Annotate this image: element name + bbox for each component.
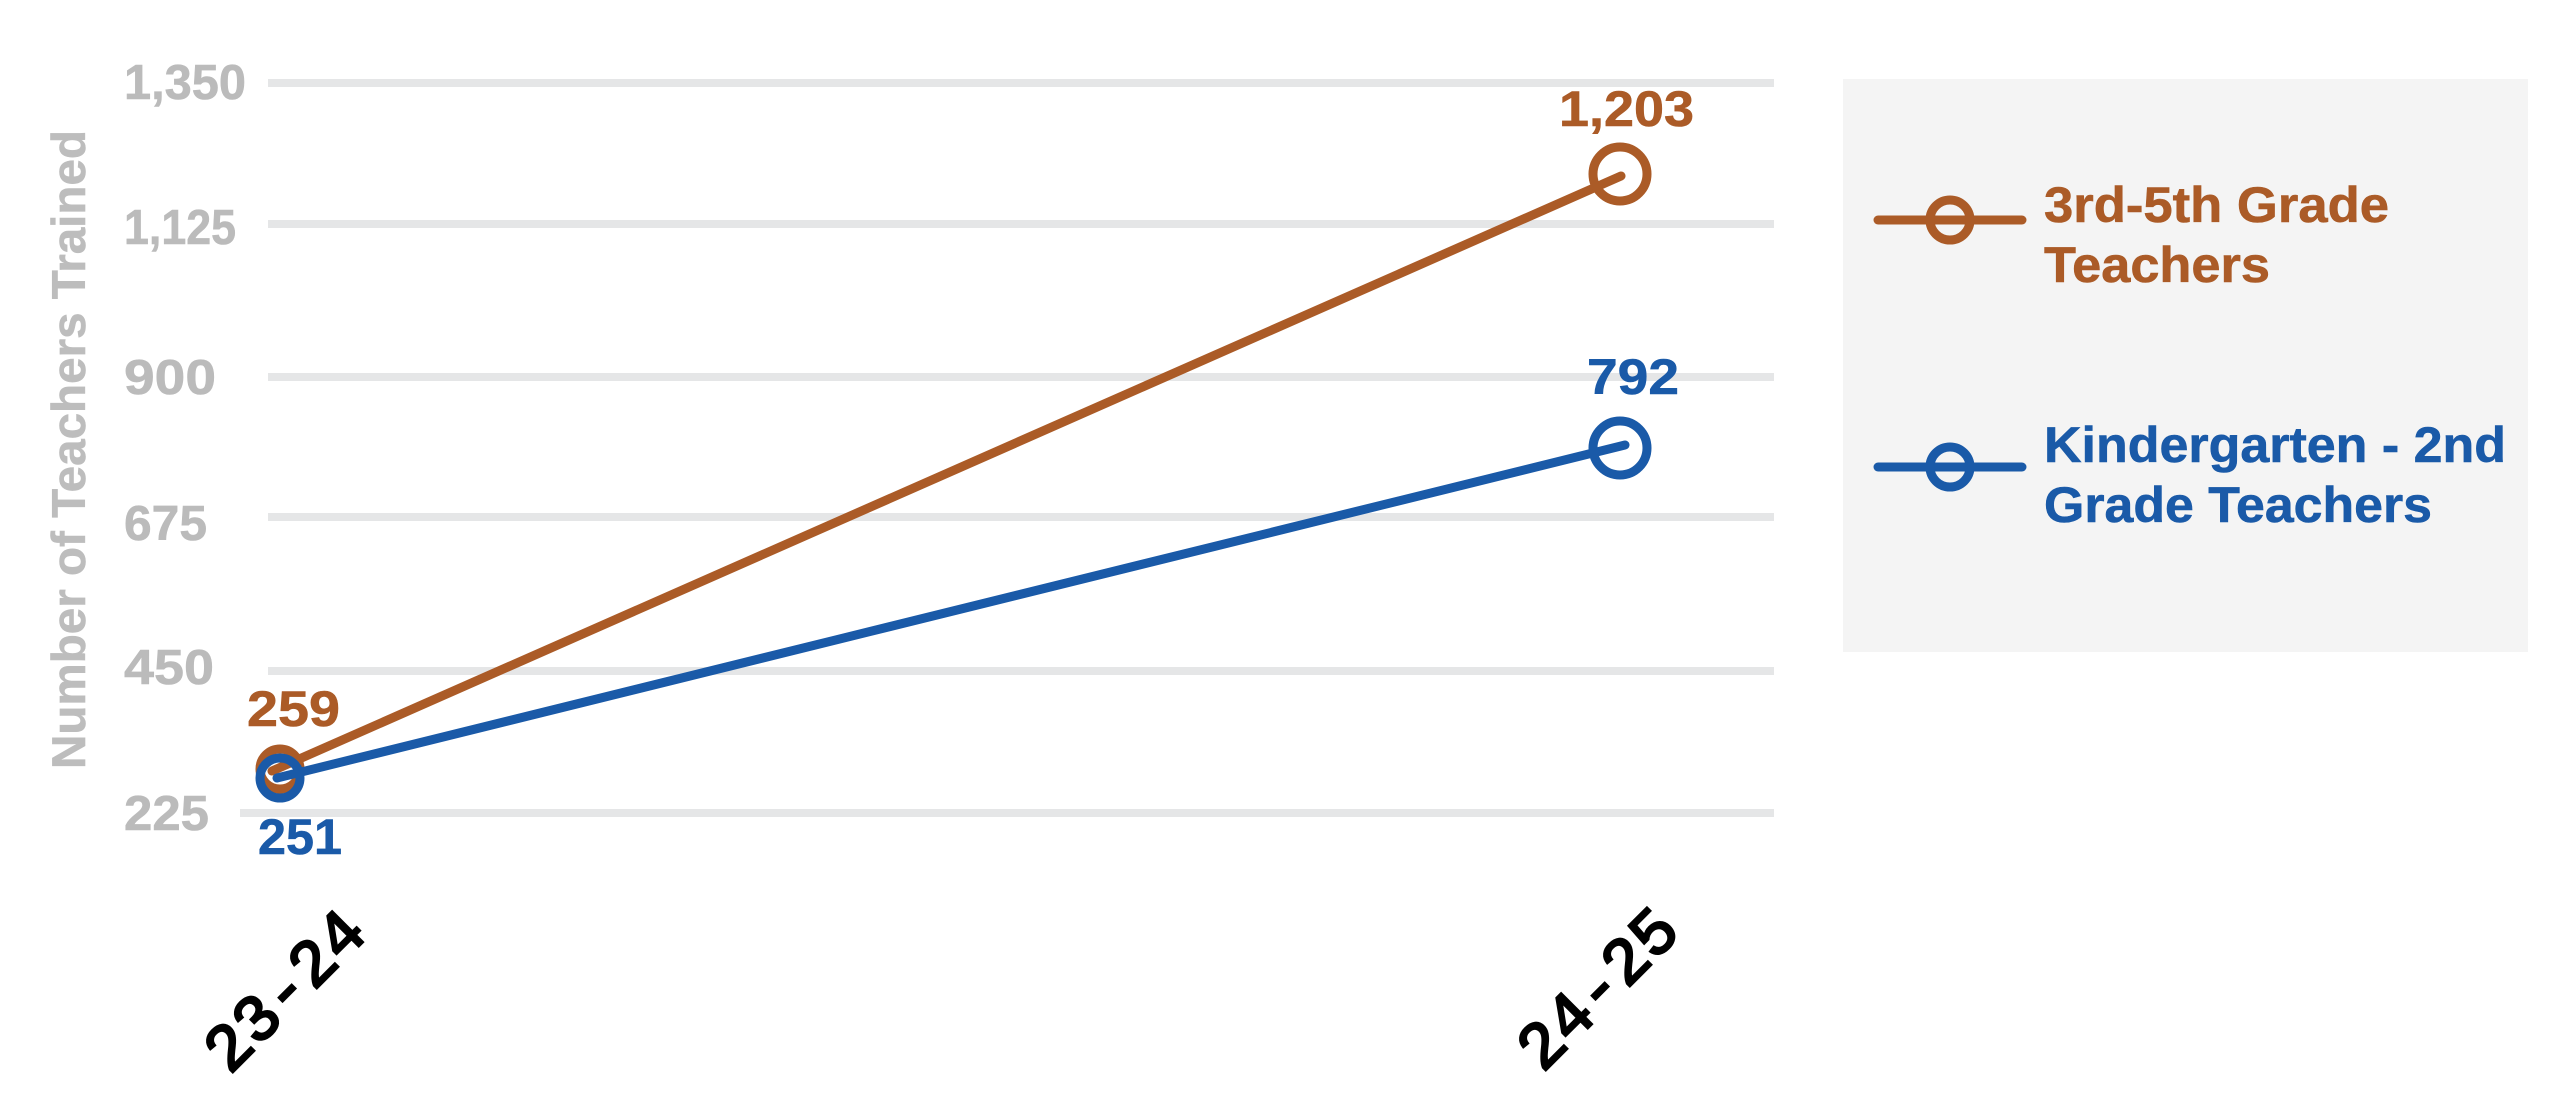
series: kindergarten to 2nd grade teachers: 251 (258, 809, 342, 865)
y-axis tick labels: 450 (124, 641, 214, 695)
y-axis tick labels: 1,125 (124, 201, 236, 255)
series: 3rd-5th grade teachers: 1,203 (1559, 81, 1694, 137)
x-axis labels: 23-24 (191, 897, 384, 1090)
legend item: 3rd-5th grade teachers: Teachers (2044, 237, 2270, 293)
series: kindergarten to 2nd grade teachers: 792 (1587, 349, 1679, 405)
y-axis tick labels (124, 56, 246, 841)
x-axis labels (191, 895, 1697, 1090)
legend item: kindergarten to 2nd grade teachers: Grade Teachers (2044, 477, 2432, 533)
y-axis tick labels: 900 (124, 351, 216, 405)
legend panel (1843, 79, 2528, 652)
series: 3rd-5th grade teachers: 259 (247, 681, 340, 737)
y-axis tick labels: 1,350 (124, 56, 246, 110)
series: 3rd-5th grade teachers (247, 81, 1694, 789)
y-axis tick labels: 225 (124, 787, 209, 841)
legend item: 3rd-5th grade teachers: 3rd-5th Grade (2044, 177, 2389, 233)
legend item: 3rd-5th grade teachers (1878, 177, 2389, 293)
legend item: kindergarten to 2nd grade teachers (1878, 417, 2506, 533)
y-axis tick labels: 675 (124, 497, 207, 551)
y-axis title: Number of Teachers Trained (42, 130, 95, 769)
legend item: kindergarten to 2nd grade teachers: Kindergarten - 2nd (2044, 417, 2506, 473)
x-axis labels: 24-25 (1504, 895, 1697, 1088)
series: kindergarten to 2nd grade teachers (258, 349, 1679, 865)
